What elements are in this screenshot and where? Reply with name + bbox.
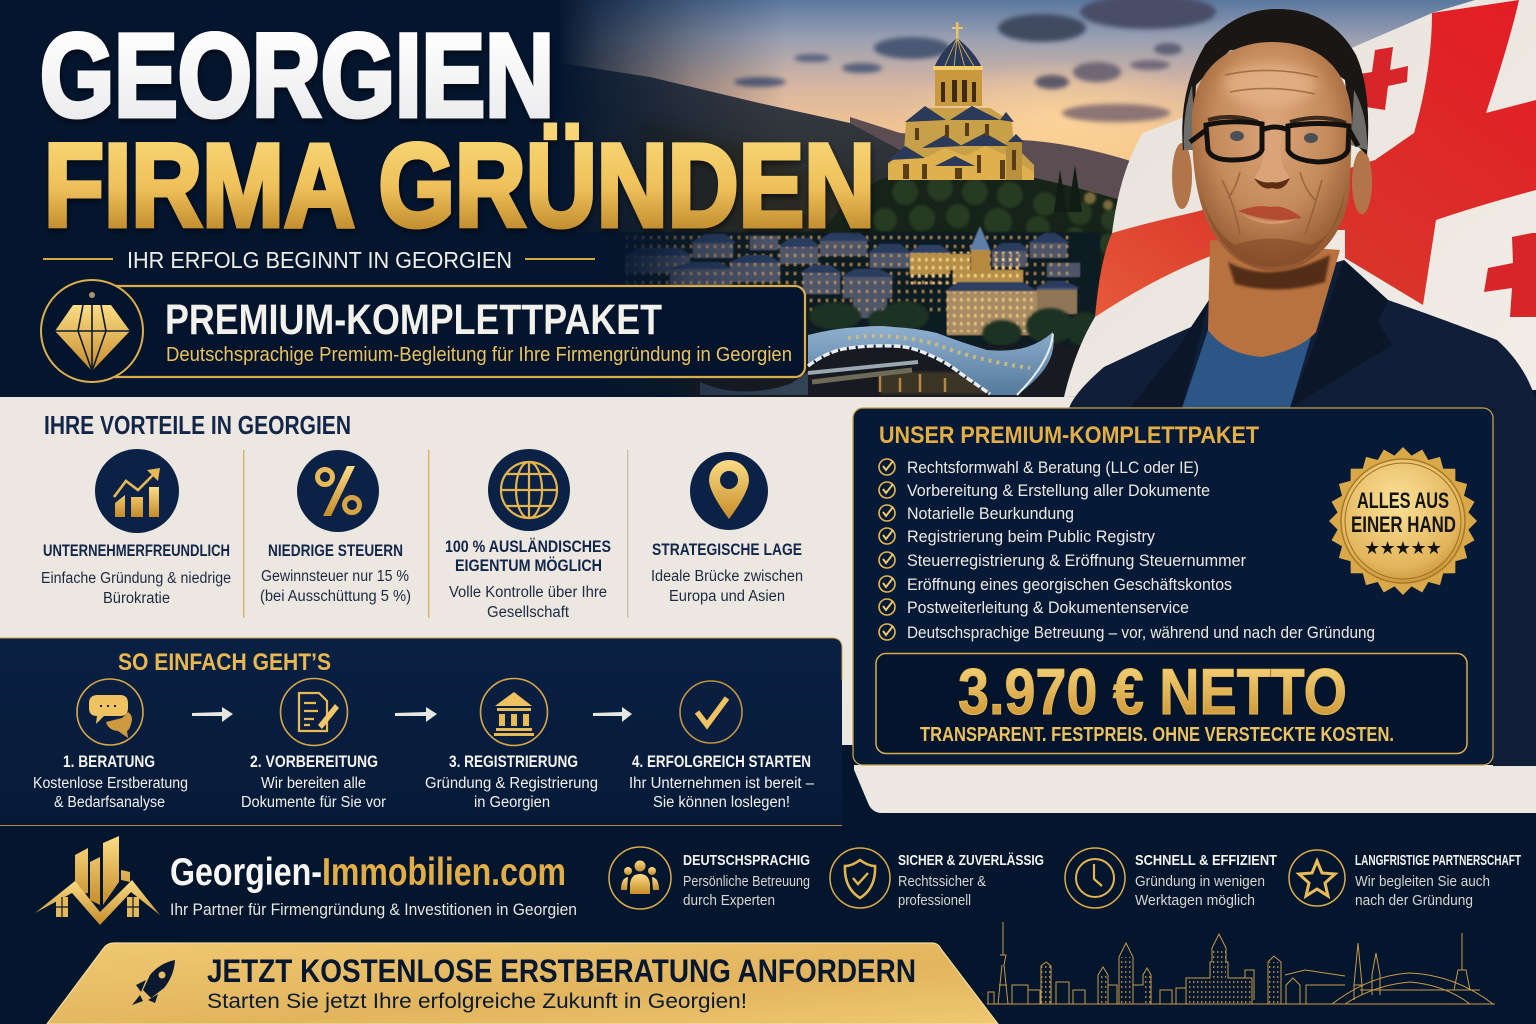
jacket	[1069, 260, 1536, 766]
icon: star	[1289, 850, 1345, 906]
item 5: Steuerregistrierung & Eröffnung Steuernummer	[907, 551, 1246, 570]
title line: Georgien: GEORGIEN	[40, 10, 554, 142]
badge: Alles aus einer Hand: EINER HAND	[1351, 512, 1456, 537]
arrow	[593, 707, 632, 722]
step 1: 1. BERATUNG	[63, 752, 155, 771]
face	[1192, 42, 1352, 271]
advantage: strategic location: STRATEGISCHE LAGE	[652, 540, 802, 559]
step 4: 4. ERFOLGREICH STARTEN	[632, 752, 811, 771]
feature: secure: SICHER & ZUVERLÄSSIG	[898, 852, 1044, 869]
feature: German speaking: Persönliche Betreuung	[683, 874, 810, 890]
feature: fast: Werktagen möglich	[1135, 893, 1255, 909]
glasses	[1190, 122, 1358, 162]
advantage: foreign ownership: Gesellschaft	[487, 604, 570, 621]
feature: fast	[1065, 848, 1277, 909]
Georgian flag	[1064, 0, 1536, 397]
main title	[40, 10, 875, 252]
icon: clock	[1065, 848, 1125, 908]
hair	[1182, 9, 1368, 155]
step 1: Kostenlose Erstberatung	[33, 775, 188, 792]
feature: secure: professionell	[898, 893, 971, 909]
step 1	[33, 679, 188, 811]
icon: rocket	[132, 960, 175, 1005]
step 2: Wir bereiten alle	[261, 775, 366, 792]
advantage: low taxes: NIEDRIGE STEUERN	[268, 541, 403, 560]
badge: Alles aus einer Hand	[1329, 447, 1477, 595]
logo: Georgien-Immobilien: Georgien-	[170, 851, 322, 894]
step 3: Gründung & Registrierung	[425, 775, 598, 792]
step 1: & Bedarfsanalyse	[54, 794, 165, 811]
feature: long-term partnership: Wir begleiten Sie auch	[1355, 874, 1490, 890]
banner subheading: Deutschsprachige Premium-Begleitung für Ihre Firmengründung in Georgien	[166, 344, 792, 366]
price note: TRANSPARENT. FESTPREIS. OHNE VERSTECKTE KOSTEN.	[920, 724, 1394, 746]
feature: German speaking: durch Experten	[683, 893, 775, 909]
navy fade over photo	[0, 0, 786, 397]
step 3	[425, 678, 598, 811]
ears	[1172, 143, 1192, 209]
icon: map pin	[690, 452, 768, 530]
feature: long-term partnership: nach der Gründung	[1355, 893, 1473, 909]
steps background	[0, 638, 842, 826]
feature: German speaking	[609, 847, 810, 909]
call to action subheading: Starten Sie jetzt Ihre erfolgreiche Zukunft in Georgien!	[207, 990, 747, 1013]
icon: document	[280, 678, 348, 746]
step 2: Dokumente für Sie vor	[241, 794, 386, 811]
call to action banner	[47, 943, 998, 1024]
t-shirt	[1182, 330, 1312, 408]
heading: IHRE VORTEILE IN GEORGIEN	[44, 410, 351, 440]
price box	[876, 654, 1467, 754]
price: 3.970 € NETTO	[958, 655, 1347, 728]
advantage: strategic location	[651, 452, 803, 605]
icon: check mark	[680, 681, 742, 743]
step 4: Ihr Unternehmen ist bereit –	[629, 775, 814, 792]
item 8: Deutschsprachige Betreuung – vor, während und nach der Gründung	[907, 623, 1375, 642]
advantage: business friendly: Bürokratie	[103, 590, 170, 607]
logo: Georgien-Immobilien	[35, 836, 577, 925]
heading: UNSER PREMIUM-KOMPLETTPAKET	[879, 422, 1259, 449]
eyebrows	[1208, 117, 1346, 123]
advantage: strategic location: Europa und Asien	[669, 588, 785, 605]
section: steps	[0, 638, 854, 827]
item 4: Registrierung beim Public Registry	[907, 527, 1155, 546]
section: advantages	[41, 410, 803, 621]
item 2: Vorbereitung & Erstellung aller Dokumente	[907, 481, 1210, 500]
premium banner	[41, 280, 805, 382]
Sameba cathedral	[888, 22, 1034, 180]
advantage: low taxes: (bei Ausschüttung 5 %)	[260, 588, 411, 605]
arrow	[395, 707, 437, 722]
feature: fast: Gründung in wenigen	[1135, 874, 1265, 890]
river foreground	[690, 345, 1080, 397]
step 2	[241, 678, 386, 811]
feature: secure	[830, 848, 1044, 909]
badge: Alles aus einer Hand: ★★★★★	[1364, 538, 1442, 559]
advantage: business friendly: Einfache Gründung & niedrige	[41, 570, 231, 587]
step 4	[629, 681, 814, 811]
eyes	[1230, 131, 1318, 143]
advantage: strategic location: Ideale Brücke zwischen	[651, 568, 803, 585]
skyline illustration	[987, 922, 1495, 1004]
nose	[1254, 135, 1290, 189]
lit houses	[910, 252, 1023, 284]
lapels	[1130, 300, 1209, 408]
badge: Alles aus einer Hand: ALLES AUS	[1357, 488, 1449, 513]
footer brand and features	[35, 836, 1521, 925]
advantage: low taxes: Gewinnsteuer nur 15 %	[261, 568, 409, 585]
logo: Georgien-Immobilien: Immobilien.com	[322, 851, 566, 894]
icon: percent	[297, 450, 379, 532]
banner heading: PREMIUM-KOMPLETTPAKET	[165, 296, 662, 344]
panel: premium package	[853, 408, 1493, 765]
icon: globe	[488, 449, 570, 531]
item 1: Rechtsformwahl & Beratung (LLC oder IE)	[907, 458, 1199, 477]
panel background	[853, 408, 1493, 765]
step 4: Sie können loslegen!	[653, 794, 790, 811]
large building	[947, 290, 1037, 335]
advantage: low taxes	[260, 450, 411, 605]
icon: people	[609, 847, 671, 909]
item 6: Eröffnung eines georgischen Geschäftskontos	[907, 575, 1232, 594]
mouth	[1238, 206, 1302, 220]
advantage: business friendly	[41, 449, 231, 607]
icon: institution	[480, 678, 548, 746]
feature: secure: Rechtssicher &	[898, 874, 986, 890]
tree-covered hill	[820, 165, 1136, 335]
arrow	[192, 707, 233, 722]
portrait: man with glasses	[1069, 9, 1536, 766]
tagline: IHR ERFOLG BEGINNT IN GEORGIEN	[127, 247, 512, 273]
advantage: foreign ownership	[445, 449, 611, 621]
icon: diamond	[41, 280, 143, 382]
panel: light background	[0, 397, 1536, 813]
hills	[560, 63, 1134, 260]
icon: growth chart	[95, 449, 179, 533]
advantage: business friendly: UNTERNEHMERFREUNDLICH	[43, 541, 230, 560]
hillside town	[570, 226, 1103, 395]
Bridge of Peace	[700, 326, 1054, 395]
item 3: Notarielle Beurkundung	[907, 504, 1074, 523]
heading: SO EINFACH GEHT’S	[118, 649, 331, 676]
advantage: foreign ownership: 100 % AUSLÄNDISCHES	[445, 537, 611, 556]
face shading	[1200, 63, 1345, 267]
banner box	[75, 286, 805, 377]
step 3: in Georgien	[474, 794, 550, 811]
sky	[540, 0, 1536, 240]
logo: Georgien-Immobilien: Ihr Partner für Firmengründung & Investitionen in Georgien	[170, 900, 577, 919]
icon: chat bubbles	[77, 679, 143, 745]
advantage: foreign ownership: Volle Kontrolle über Ihre	[449, 584, 607, 601]
feature: German speaking: DEUTSCHSPRACHIG	[683, 852, 810, 869]
hero photo: Tbilisi cityscape	[0, 0, 1536, 397]
feature: fast: SCHNELL & EFFIZIENT	[1135, 852, 1277, 869]
logo mark	[35, 836, 160, 925]
icon: shield	[830, 848, 890, 908]
neck	[1208, 240, 1340, 357]
item 7: Postweiterleitung & Dokumentenservice	[907, 598, 1189, 617]
advantage: foreign ownership: EIGENTUM MÖGLICH	[455, 556, 602, 575]
checklist	[879, 458, 1375, 642]
title line: Firma gründen: FIRMA GRÜNDEN	[44, 120, 875, 252]
feature: long-term partnership	[1289, 850, 1521, 909]
call to action heading: JETZT KOSTENLOSE ERSTBERATUNG ANFORDERN	[207, 953, 916, 989]
step 3: 3. REGISTRIERUNG	[449, 752, 578, 771]
step 2: 2. VORBEREITUNG	[250, 752, 378, 771]
